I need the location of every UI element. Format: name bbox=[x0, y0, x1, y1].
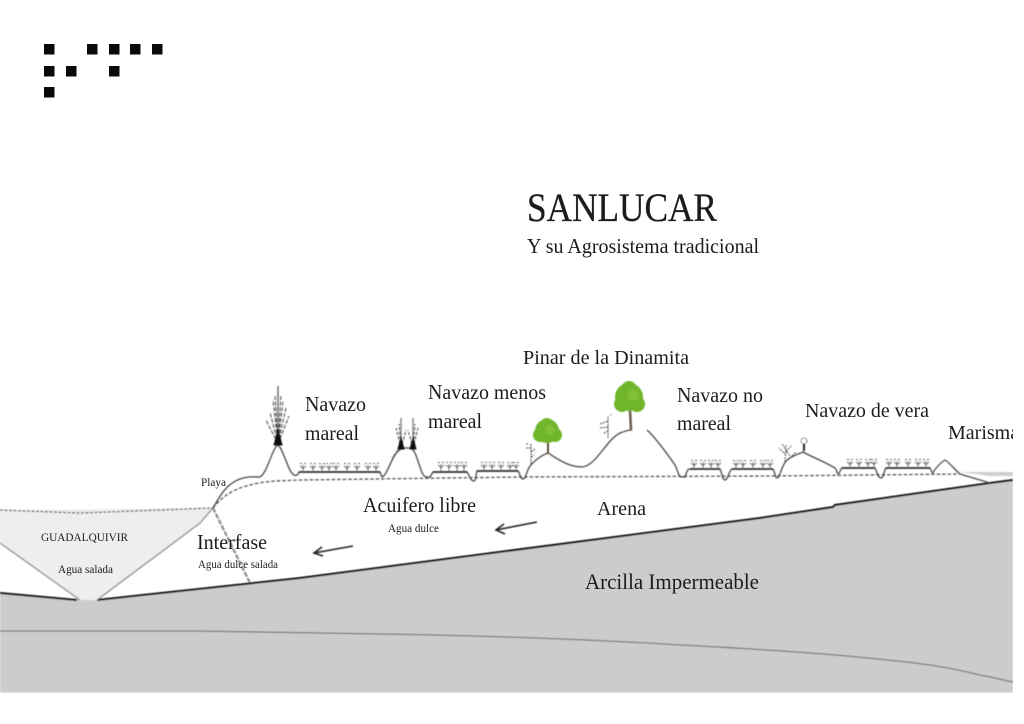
label: Guadalquivir: GUADALQUIVIR bbox=[41, 530, 128, 544]
crops on navazo plots bbox=[300, 460, 929, 472]
label: Marisma: Marisma bbox=[948, 422, 1019, 444]
label: Navazo de vera: Navazo de vera bbox=[805, 400, 929, 422]
label: Pinar de la Dinamita: Pinar de la Dinamita bbox=[523, 347, 689, 369]
labels bbox=[41, 347, 1019, 594]
label: Agua salada: Agua salada bbox=[58, 562, 114, 576]
marsh water band bbox=[960, 472, 1013, 476]
label: Navazo no mareal bbox=[677, 383, 763, 435]
label: Navazo no mareal: Navazo no bbox=[677, 383, 763, 407]
title: SANLUCAR bbox=[527, 185, 717, 230]
label: Agua dulce salada: Agua dulce salada bbox=[198, 557, 279, 571]
impermeable clay boundary line bbox=[0, 480, 1013, 600]
icon: double reed clump on dune bbox=[392, 418, 418, 458]
label: Navazo menos mareal bbox=[428, 380, 546, 433]
lower stratum line bbox=[0, 631, 1013, 682]
terrain profile: beach, dunes and navazos bbox=[213, 430, 990, 508]
icon: black square dot pattern bbox=[44, 44, 162, 98]
icon: small pine tree bbox=[533, 418, 562, 453]
label: Playa: Playa bbox=[201, 475, 227, 489]
label: Navazo menos mareal: mareal bbox=[428, 409, 482, 433]
river banks bbox=[0, 508, 213, 600]
label: Agua dulce: Agua dulce bbox=[388, 521, 439, 535]
right page margin mask bbox=[1013, 420, 1024, 700]
label: Navazo mareal: Navazo bbox=[305, 392, 366, 416]
label: Interfase: Interfase bbox=[197, 530, 267, 554]
impermeable clay layer bbox=[0, 480, 1013, 692]
icon: shrub beside large pine bbox=[600, 414, 611, 438]
arrow: right groundwater flow bbox=[496, 522, 537, 534]
label: Acuifero libre: Acuifero libre bbox=[363, 493, 476, 517]
interface line bbox=[213, 508, 250, 583]
cross-section diagram bbox=[0, 381, 1013, 692]
icon: shrub beside small pine bbox=[526, 443, 535, 464]
icon: large reed clump on dune bbox=[266, 386, 289, 445]
label: Navazo mareal bbox=[305, 392, 366, 445]
label: Arena: Arena bbox=[597, 498, 646, 520]
arrow: left groundwater flow bbox=[314, 546, 353, 556]
navazo crop platform bases bbox=[299, 468, 930, 472]
label: Navazo menos mareal: Navazo menos bbox=[428, 380, 546, 404]
label: Navazo mareal: mareal bbox=[305, 421, 359, 445]
subtitle: Y su Agrosistema tradicional bbox=[527, 234, 759, 258]
label: Navazo no mareal: mareal bbox=[677, 411, 731, 435]
water table dashed line bbox=[213, 474, 960, 508]
icon: bushes on navazo de vera dune bbox=[779, 438, 807, 462]
label: Arcilla Impermeable: Arcilla Impermeable bbox=[585, 569, 759, 594]
river surface dashed line bbox=[0, 508, 213, 513]
icon: large pine tree bbox=[614, 381, 645, 430]
Guadalquivir river body bbox=[0, 508, 213, 600]
